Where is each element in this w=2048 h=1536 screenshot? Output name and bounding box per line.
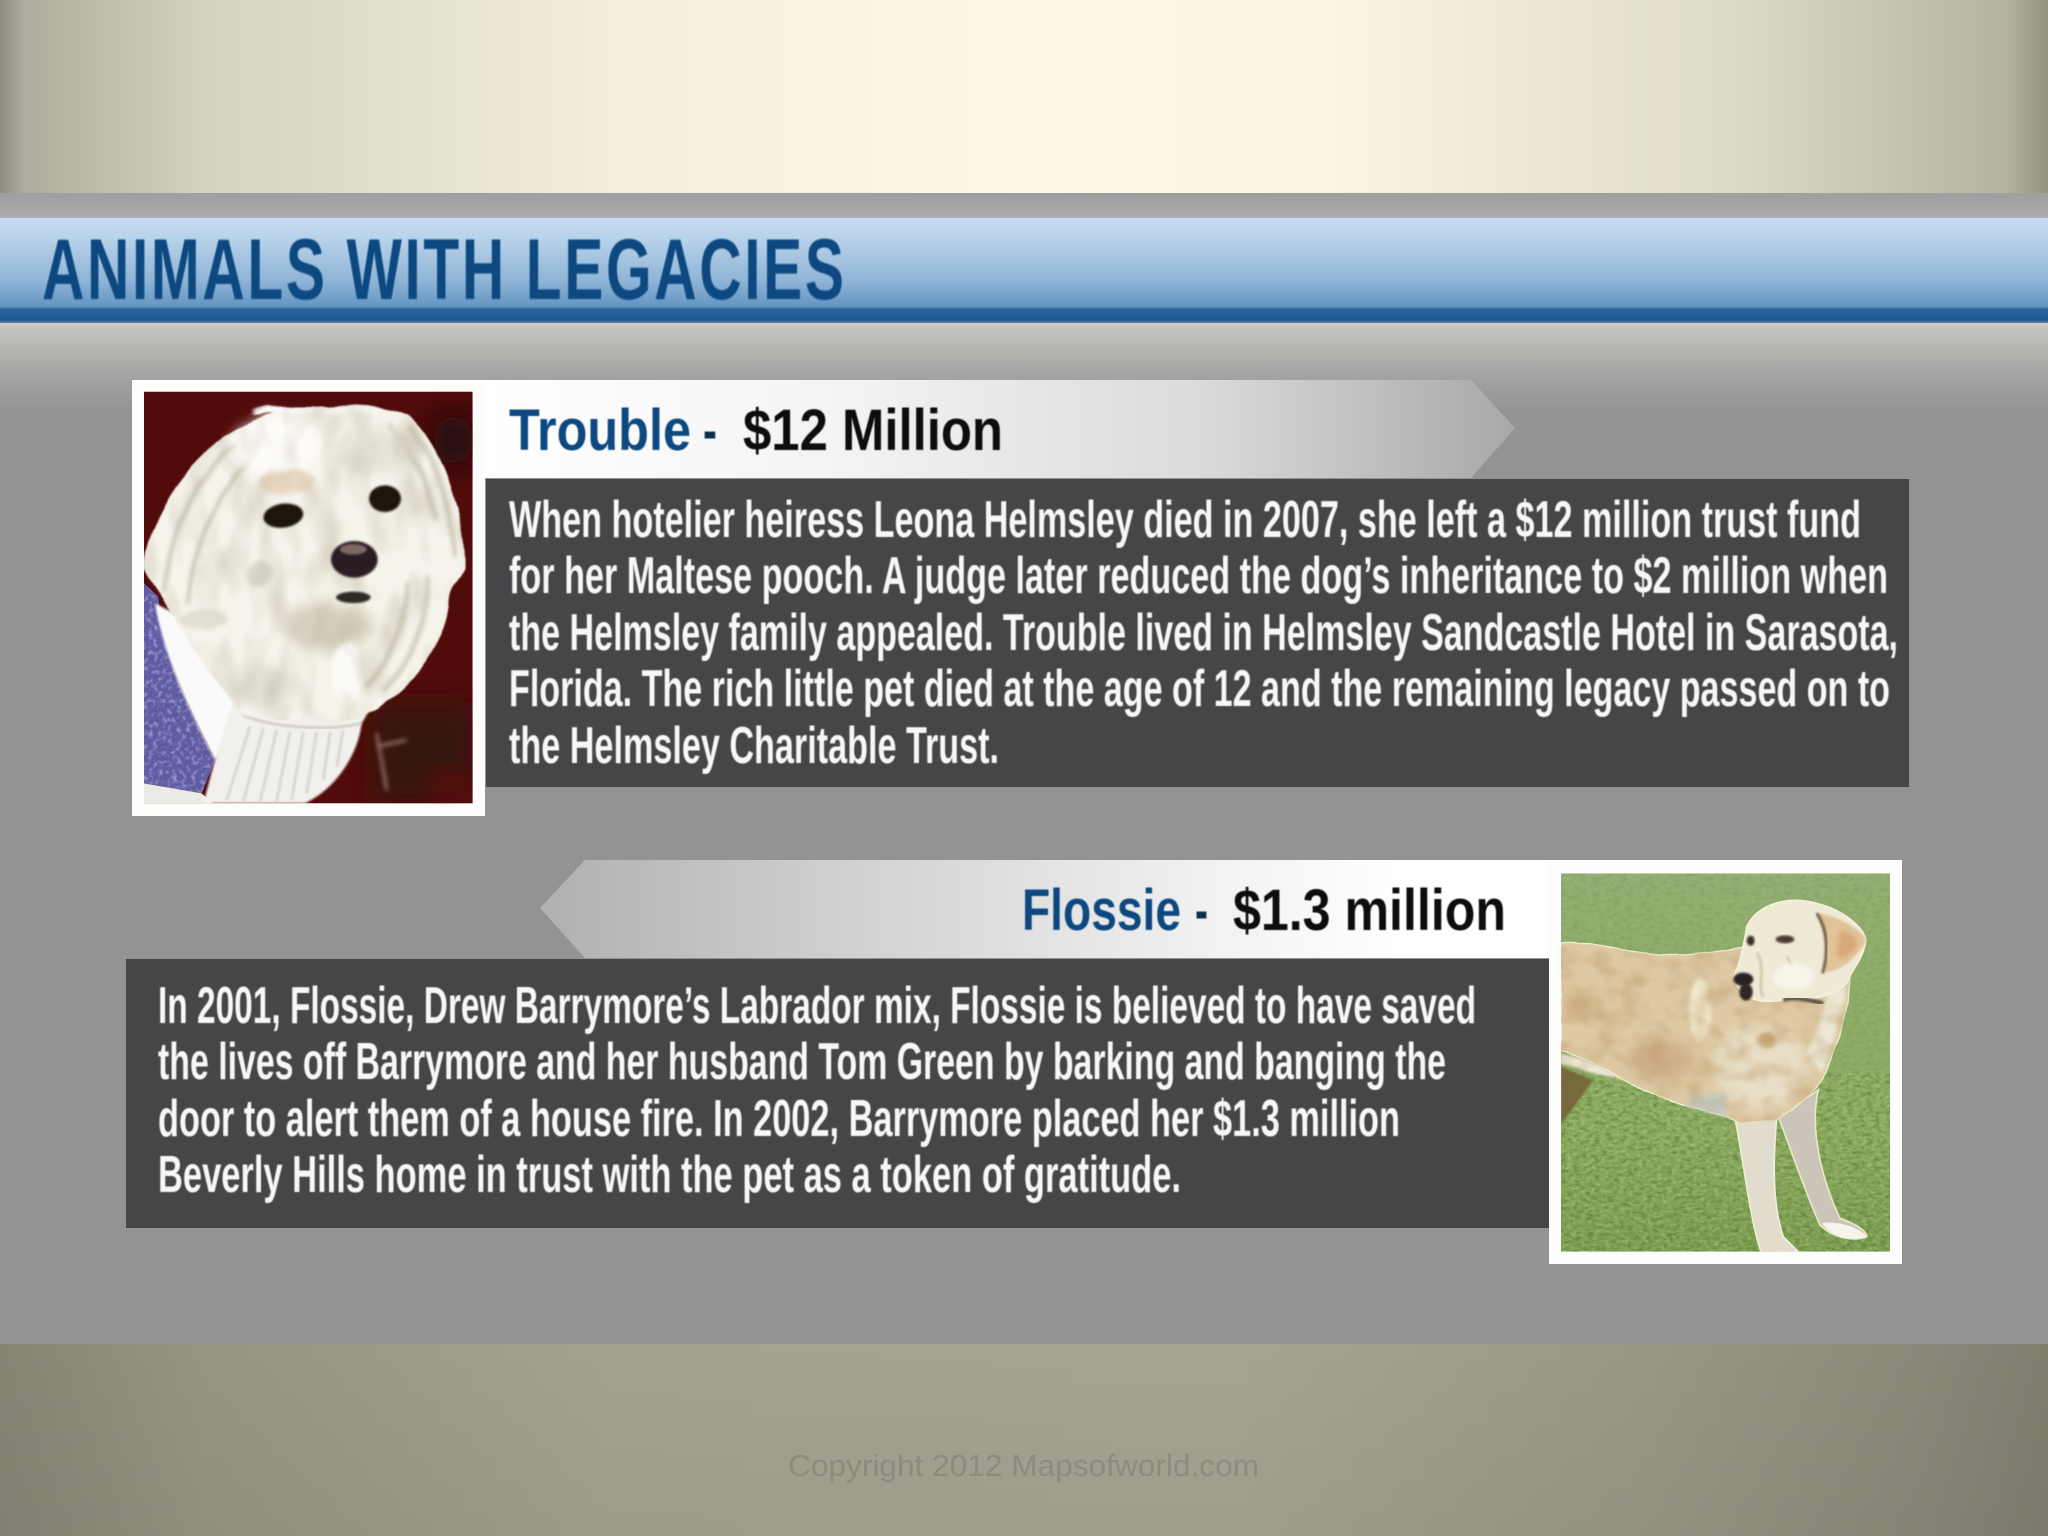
heading: Flossie $1.3 million: $1.3 million [1233,878,1506,943]
body text: Trouble [509,491,1898,775]
body text: Flossie: Beverly Hills home in trust with the pet as a token of gratitude. [158,1146,1181,1204]
eyes [1747,936,1755,946]
photo: Trouble the Maltese [132,380,485,816]
heading: Trouble $12 Million: $12 Million [743,398,1003,463]
background: upper grey band [0,193,2048,219]
heading: Flossie $1.3 million [1022,878,1506,943]
arrow banner: Flossie [540,860,1560,958]
heading: Trouble $12 Million: - [703,398,717,463]
head [1733,900,1866,1003]
nose and mouth [1733,973,1753,986]
sweater: purple [144,583,215,793]
copyright: Copyright 2012 Mapsofworld.com [788,1448,1259,1483]
eyes [262,485,401,530]
header bar with title [0,218,2048,323]
text panel: Trouble [486,479,1909,787]
sweater: white trim [144,783,213,803]
heading: Flossie $1.3 million: - [1195,878,1208,943]
heading: Trouble $12 Million [509,398,1003,463]
text panel: Flossie [126,959,1549,1228]
body [1561,942,1850,1123]
near foreleg [1734,1120,1800,1252]
body text: Trouble: the Helmsley Charitable Trust. [509,717,999,775]
title: ANIMALS WITH LEGACIES [42,221,844,318]
background: cream top panel [0,0,2048,193]
heading: Trouble $12 Million: Trouble [509,398,691,463]
body text: Flossie [158,977,1476,1204]
ear [1817,913,1866,972]
far foreleg [1778,1090,1867,1239]
body text: Flossie: door to alert them of a house fire. In 2002, Barrymore placed her $1.3 million [158,1090,1400,1148]
collar [1783,999,1823,1003]
back leg [1561,1067,1593,1125]
nose and mouth [331,541,378,603]
photo: Flossie the Labrador [1549,860,1902,1264]
background: grey central panel [0,193,2048,1345]
background: beige bottom panel [0,1344,2048,1536]
background: fade below header [0,322,2048,412]
head [144,406,465,721]
sweater: collar [203,700,373,803]
heading: Flossie $1.3 million: Flossie [1022,878,1181,943]
arrow banner: Trouble [470,380,1515,478]
